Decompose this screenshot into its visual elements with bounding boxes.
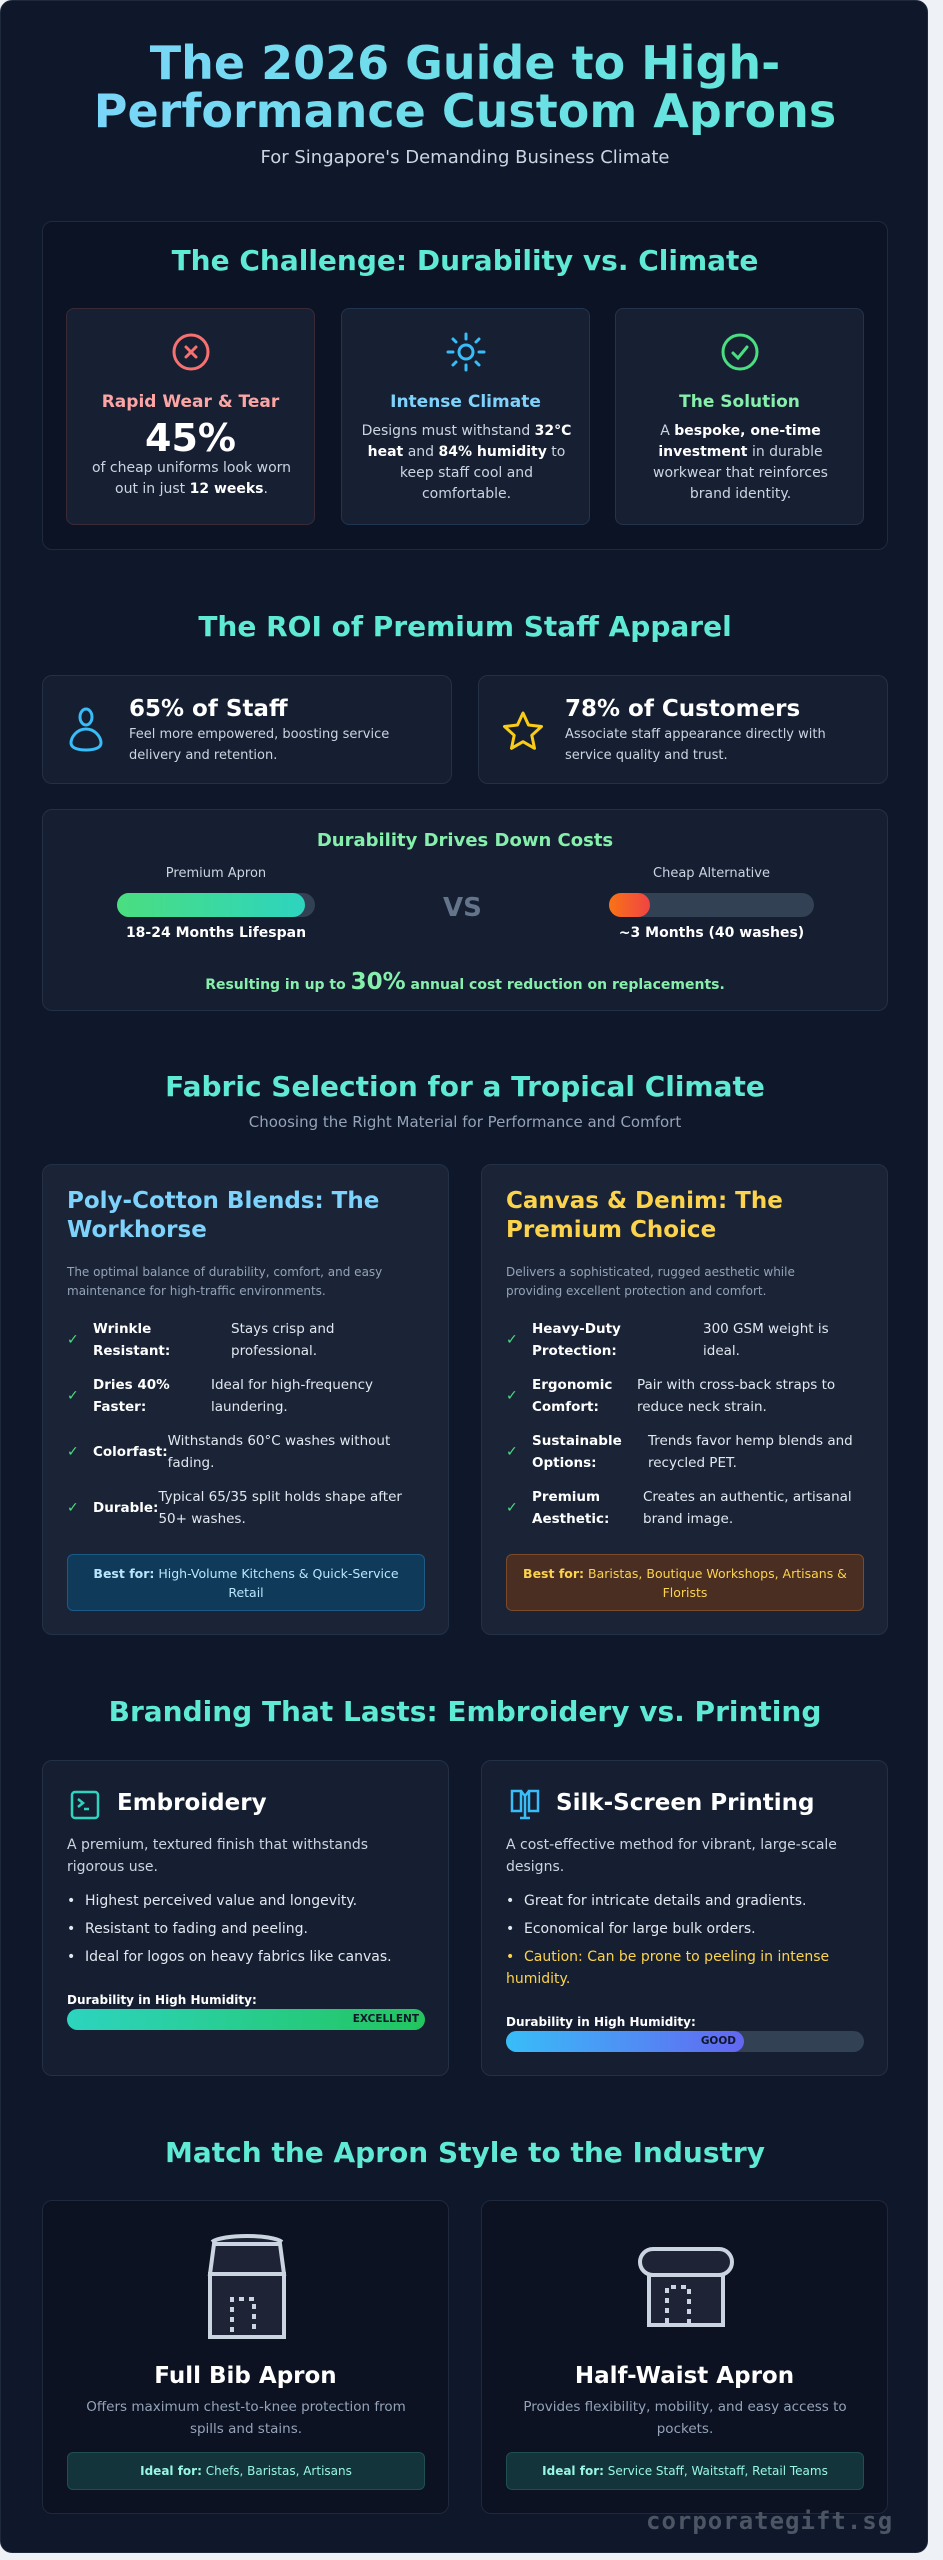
subtitle: For Singapore's Demanding Business Climate <box>261 147 669 168</box>
panel: durability costs <box>42 809 888 1011</box>
stat card: staff: 65% of Staff <box>129 696 288 722</box>
ideal for: Ideal for: Chefs, Baristas, Artisans <box>140 2464 352 2478</box>
card: embroidery: Ideal for logos on heavy fabrics like canvas. <box>85 1949 392 1965</box>
stat card: staff <box>42 675 452 784</box>
stat card: staff: Feel more empowered, boosting service delivery and retention. <box>129 727 389 763</box>
bar: premium: 18-24 Months Lifespan <box>126 925 306 941</box>
card: poly-cotton: ✓ <box>67 1332 79 1348</box>
stat card: customers: 78% of Customers <box>565 696 800 722</box>
card: poly-cotton: Poly-Cotton Blends: The Workhorse <box>67 1188 379 1243</box>
card: silk-screen <box>481 1760 888 2076</box>
card: canvas: Creates an authentic, artisanal brand image. <box>643 1489 852 1527</box>
card: canvas: ✓ <box>506 1388 518 1404</box>
stat card: customers: Associate staff appearance directly with service quality and trust. <box>565 727 826 763</box>
card: poly-cotton: ✓ <box>67 1500 79 1516</box>
card: embroidery: Highest perceived value and longevity. <box>85 1893 357 1909</box>
best for <box>506 1554 864 1611</box>
card: full bib <box>42 2200 449 2514</box>
card: canvas: ✓ <box>506 1444 518 1460</box>
icon: star <box>502 712 543 750</box>
ideal for <box>506 2452 864 2490</box>
card: rapid wear <box>66 308 315 525</box>
card: canvas: Heavy-Duty Protection: <box>532 1321 621 1359</box>
ideal for <box>67 2452 425 2490</box>
card: silk-screen: Silk-Screen Printing <box>556 1790 814 1816</box>
card: canvas: Sustainable Options: <box>532 1433 622 1471</box>
card: half waist: Half-Waist Apron <box>575 2363 794 2389</box>
card: embroidery: Durability in High Humidity: <box>67 1993 257 2007</box>
card: silk-screen: Durability in High Humidity: <box>506 2015 696 2029</box>
bar: excellent: EXCELLENT <box>353 2013 419 2025</box>
panel: challenge <box>42 221 888 550</box>
watermark: corporategift.sg <box>646 2507 893 2535</box>
card: poly-cotton: Ideal for high-frequency laundering. <box>211 1377 373 1415</box>
bar: good: GOOD <box>701 2035 736 2047</box>
icon: sun <box>446 332 486 372</box>
icon: x circle <box>172 334 210 370</box>
card: solution: A bespoke, one-time investment in durable workwear that reinforces brand identity. <box>653 423 828 502</box>
ideal for: Ideal for: Service Staff, Waitstaff, Retail Teams <box>542 2464 828 2478</box>
heading: apron style: Match the Apron Style to the Industry <box>165 2136 765 2169</box>
card: canvas: Delivers a sophisticated, rugged aesthetic while providing excellent protection and comfort. <box>506 1265 795 1298</box>
card: half waist <box>481 2200 888 2514</box>
card: poly-cotton: Wrinkle Resistant: <box>93 1321 170 1359</box>
card: silk-screen: Economical for large bulk orders. <box>524 1921 756 1937</box>
text: Choosing the Right Material for Performance and Comfort <box>249 1113 681 1131</box>
bar: good <box>506 2031 864 2052</box>
heading: challenge: The Challenge: Durability vs. Climate <box>172 244 758 277</box>
card: canvas: Trends favor hemp blends and recycled PET. <box>648 1433 853 1471</box>
card: full bib: Offers maximum chest-to-knee protection from spills and stains. <box>86 2399 406 2437</box>
heading: fabric: Fabric Selection for a Tropical Climate <box>165 1070 765 1103</box>
card: poly-cotton: Dries 40% Faster: <box>93 1377 170 1415</box>
title: Performance Custom Aprons <box>94 84 836 138</box>
heading: branding: Branding That Lasts: Embroidery vs. Printing <box>109 1695 821 1728</box>
card: embroidery <box>42 1760 449 2076</box>
card: canvas: ✓ <box>506 1332 518 1348</box>
panel: durability costs: Resulting in up to 30% annual cost reduction on replacements. <box>205 969 725 995</box>
card: solution: The Solution <box>679 392 800 412</box>
card: half waist: Provides flexibility, mobility, and easy access to pockets. <box>523 2399 847 2437</box>
card: embroidery: A premium, textured finish that withstands rigorous use. <box>67 1837 368 1875</box>
card: poly-cotton <box>42 1164 449 1635</box>
card: canvas <box>481 1164 888 1635</box>
card: intense climate: Intense Climate <box>390 392 541 412</box>
card: canvas: ✓ <box>506 1500 518 1516</box>
bar: excellent <box>67 2009 425 2030</box>
card: poly-cotton: ✓ <box>67 1444 79 1460</box>
icon: full bib apron <box>208 2234 286 2339</box>
bar: premium <box>117 866 315 941</box>
card: canvas: Ergonomic Comfort: <box>532 1377 612 1415</box>
card: silk-screen: Caution: Can be prone to peeling in intense humidity. <box>506 1949 829 1987</box>
icon: check circle <box>722 334 758 370</box>
card: poly-cotton: Colorfast: <box>93 1444 168 1460</box>
card: rapid wear: Rapid Wear & Tear <box>102 392 279 412</box>
panel: durability costs: Durability Drives Down Costs <box>317 830 613 851</box>
title: The 2026 Guide to High- <box>150 36 780 90</box>
best for: Best for: Baristas, Boutique Workshops, Artisans & Florists <box>523 1566 847 1600</box>
heading: ROI: The ROI of Premium Staff Apparel <box>198 610 732 643</box>
card: poly-cotton: Withstands 60°C washes without fading. <box>168 1433 390 1471</box>
card: embroidery: Embroidery <box>117 1790 267 1816</box>
card: embroidery: Resistant to fading and peeling. <box>85 1921 308 1937</box>
card: poly-cotton: Stays crisp and professional. <box>231 1321 334 1359</box>
icon: person <box>70 708 102 752</box>
bar: cheap: Cheap Alternative <box>653 866 770 881</box>
card: poly-cotton: The optimal balance of durability, comfort, and easy maintenance for high-traffic environments. <box>67 1265 382 1298</box>
card: rapid wear: of cheap uniforms look worn out in just 12 weeks. <box>92 460 291 497</box>
card: canvas: Pair with cross-back straps to reduce neck strain. <box>637 1377 835 1415</box>
card: rapid wear: 45% <box>145 416 236 460</box>
card: silk-screen: A cost-effective method for vibrant, large-scale designs. <box>506 1837 837 1875</box>
card: canvas: 300 GSM weight is ideal. <box>703 1321 829 1359</box>
best for <box>67 1554 425 1611</box>
card: solution <box>615 308 864 525</box>
icon: half waist apron <box>638 2247 734 2327</box>
card: canvas: Premium Aesthetic: <box>532 1489 609 1527</box>
stat card: customers <box>478 675 888 784</box>
icon: monitor <box>510 1790 540 1820</box>
icon: terminal <box>70 1790 100 1820</box>
title <box>1 39 929 135</box>
card: canvas: Canvas & Denim: The Premium Choice <box>506 1188 783 1243</box>
vs: VS <box>443 893 482 923</box>
bar: premium: Premium Apron <box>166 866 266 881</box>
card: intense climate: Designs must withstand 32°C heat and 84% humidity to keep staff cool and comfortable. <box>362 423 571 502</box>
card: intense climate <box>341 308 590 525</box>
bar: cheap <box>609 866 814 941</box>
bar: cheap: ~3 Months (40 washes) <box>619 925 804 941</box>
card: poly-cotton: Durable: <box>93 1500 158 1516</box>
card: full bib: Full Bib Apron <box>154 2363 337 2389</box>
best for: Best for: High-Volume Kitchens & Quick-Service Retail <box>93 1566 399 1600</box>
card: poly-cotton: ✓ <box>67 1388 79 1404</box>
card: poly-cotton: Typical 65/35 split holds shape after 50+ washes. <box>158 1489 402 1527</box>
card: silk-screen: Great for intricate details and gradients. <box>524 1893 806 1909</box>
